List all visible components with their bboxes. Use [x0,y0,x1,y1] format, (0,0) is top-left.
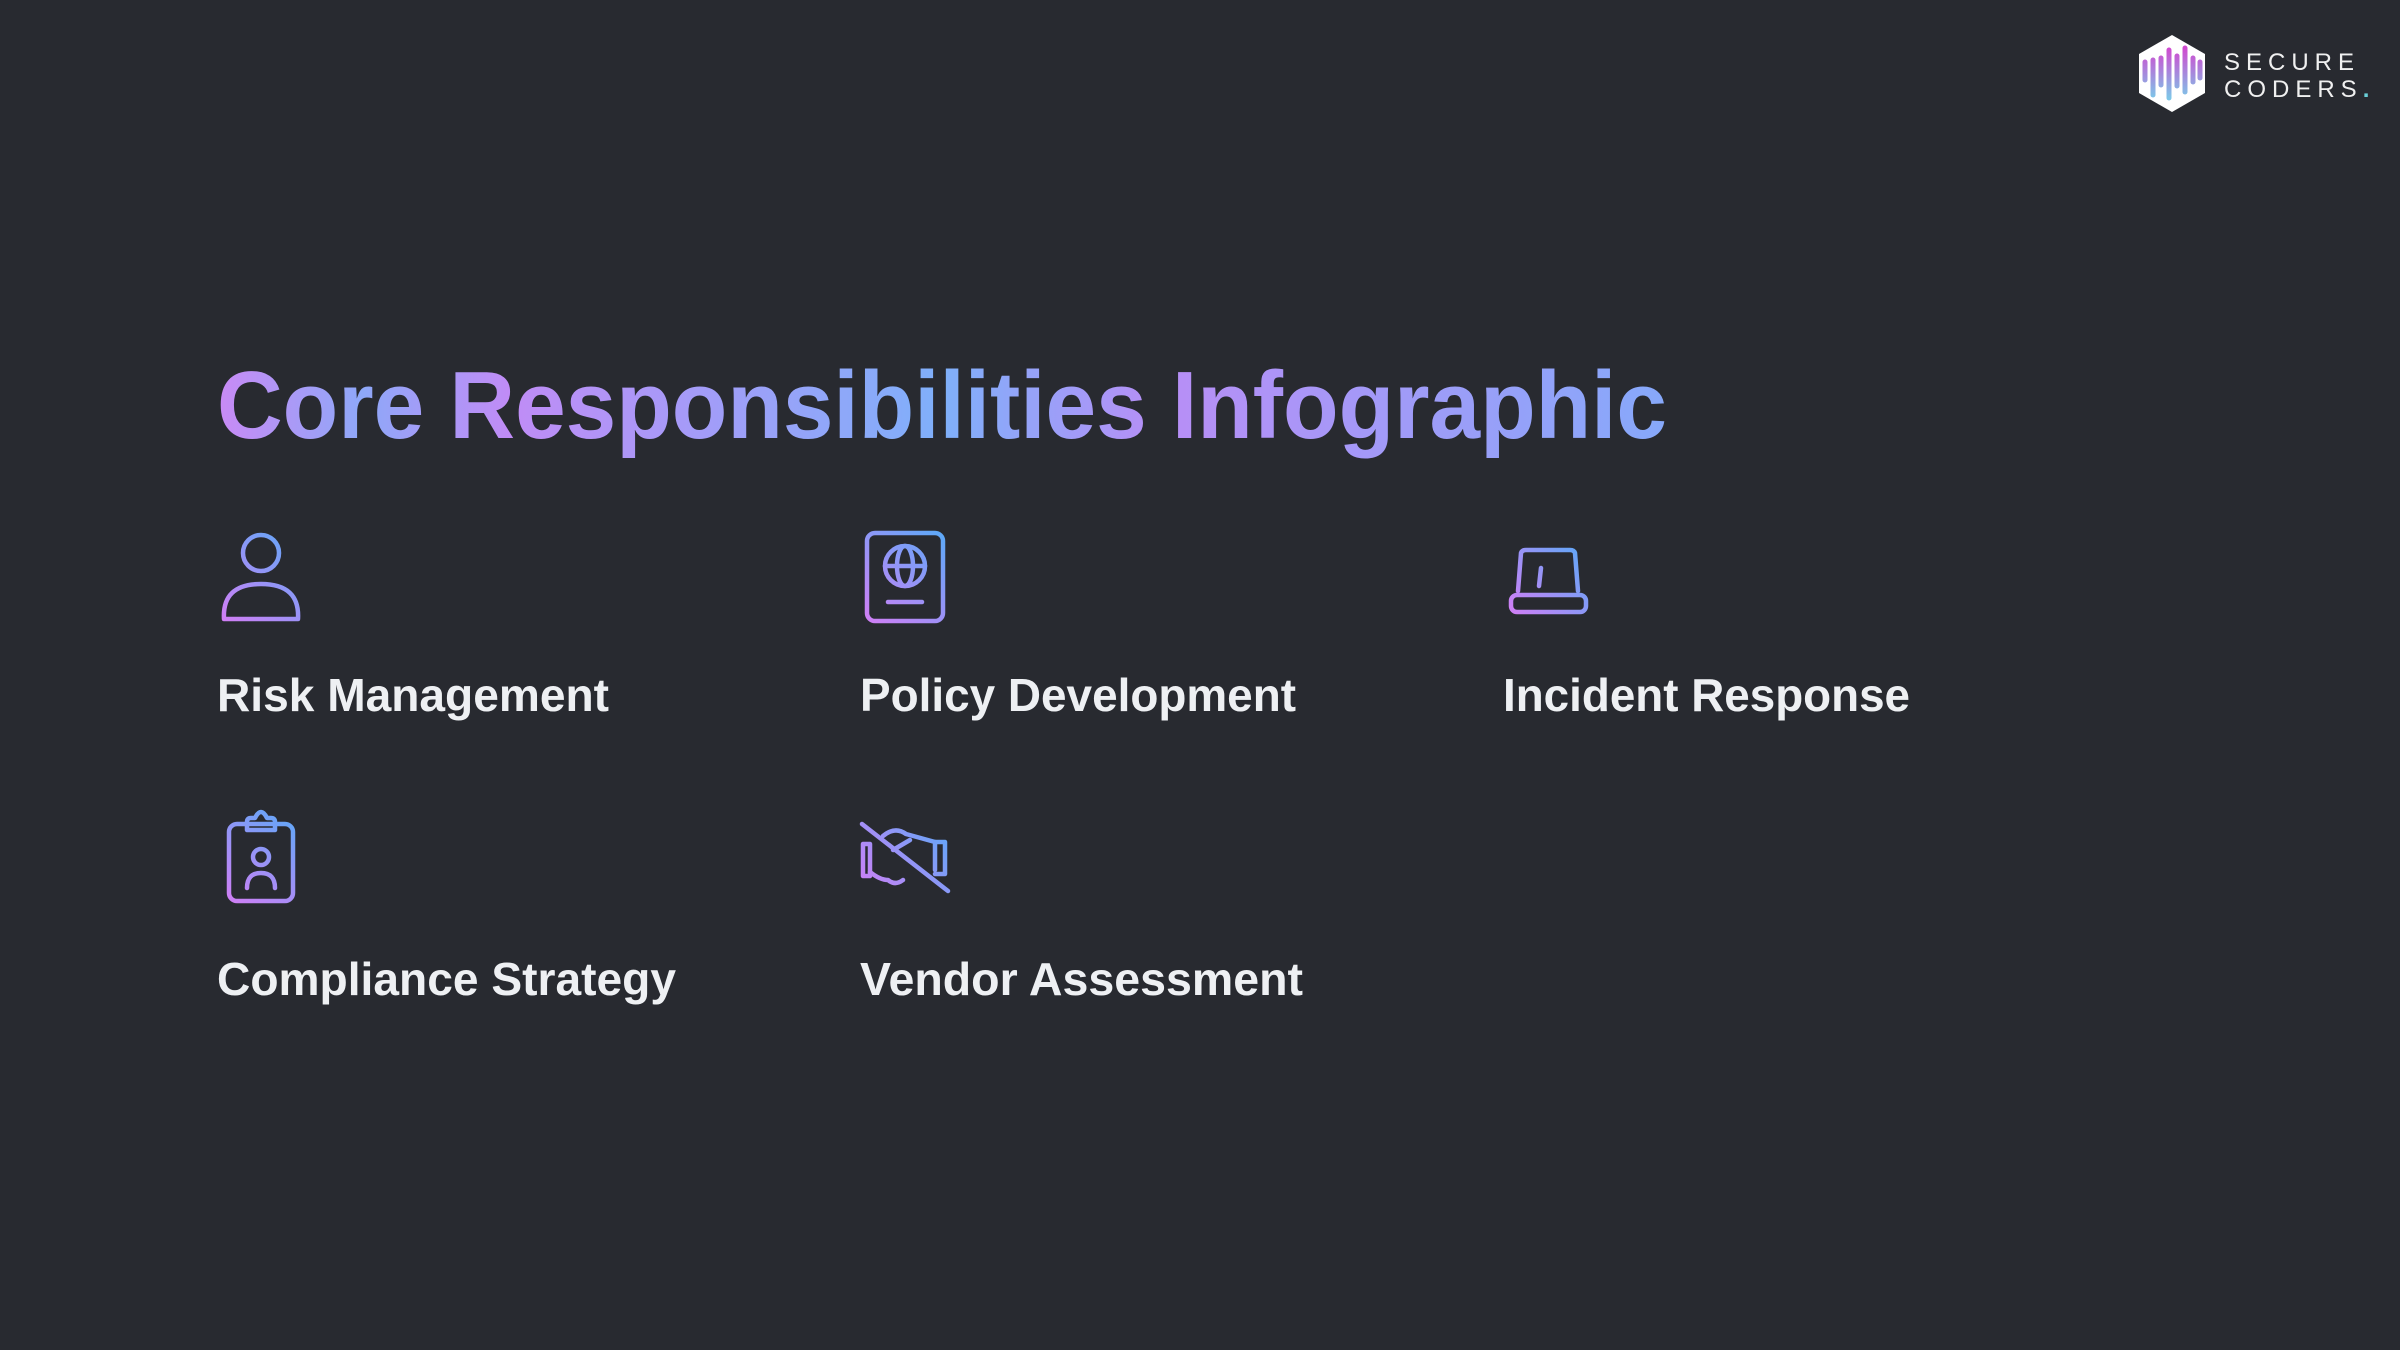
icon: siren [1511,550,1586,612]
item: Risk Management: Risk Management [217,669,609,721]
item: Policy Development: Policy Development [860,669,1296,721]
item: Risk Management [217,535,609,721]
item: Compliance Strategy [217,812,676,1005]
item: Incident Response [1503,550,1910,721]
icon: passport [867,533,943,621]
title: Core Responsibilities Infographic [217,352,1667,459]
icon: badge clipboard [229,812,293,901]
icon: person [224,535,298,619]
logo: CODERS. [2224,76,2375,103]
icon: handshake off [862,824,948,891]
item: Policy Development [860,533,1296,721]
item: Incident Response: Incident Response [1503,669,1910,721]
logo [2139,35,2375,112]
item: Vendor Assessment: Vendor Assessment [860,953,1303,1005]
logo: SECURE [2224,49,2360,76]
item: Compliance Strategy: Compliance Strategy [217,953,676,1005]
item: Vendor Assessment [860,824,1303,1005]
